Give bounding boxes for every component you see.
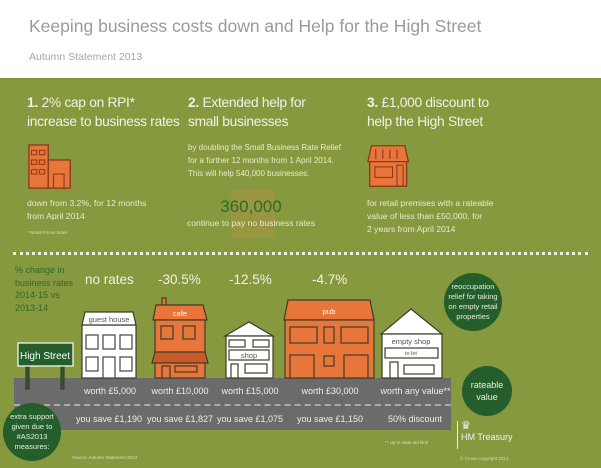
text 2: by doubling the Small Business Rate Relief xyxy=(188,143,341,152)
sign xyxy=(18,343,73,389)
logo: HM Treasury: ♛ xyxy=(461,420,471,432)
text: continue to pay no business rates xyxy=(187,218,315,228)
faint icon xyxy=(231,190,275,238)
text: you save £1,190 xyxy=(76,414,142,424)
text: you save £1,827 xyxy=(147,414,213,424)
cafe: cafe xyxy=(173,309,187,318)
callout: reoccupation: on empty retail xyxy=(448,302,498,311)
text 2 xyxy=(188,143,341,178)
callout: extra support: measures: xyxy=(14,442,50,451)
text: -30.5% xyxy=(158,272,201,287)
text 1: from April 2014 xyxy=(27,211,85,221)
heading 3: help the High Street xyxy=(367,114,483,129)
text: worth any value** xyxy=(380,386,451,396)
street scene xyxy=(17,297,444,390)
text: Source: Autumn Statement 2013 xyxy=(72,455,137,460)
heading 2: small businesses xyxy=(188,114,288,129)
change label: 2013-14 xyxy=(15,302,48,312)
icon: shop xyxy=(367,145,410,187)
text 3 xyxy=(367,198,494,234)
road xyxy=(14,378,451,430)
heading 1: increase to business rates xyxy=(27,114,179,129)
callout: extra support: #AS2013 xyxy=(17,432,47,441)
heading 2: 2. Extended help for xyxy=(188,95,306,110)
text: worth £30,000 xyxy=(301,386,359,396)
callout: reoccupation: properties xyxy=(456,312,490,321)
guest house xyxy=(82,312,136,378)
callout: extra support: extra support xyxy=(10,412,54,421)
cafe xyxy=(152,298,208,378)
logo: HM Treasury xyxy=(457,421,527,449)
icon: building xyxy=(28,144,71,189)
text: -4.7% xyxy=(312,272,347,287)
empty shop: empty shop xyxy=(392,337,430,346)
callout: rateable value: value xyxy=(476,392,498,402)
subtitle: Autumn Statement 2013 xyxy=(29,51,142,63)
text: you save £1,150 xyxy=(297,414,363,424)
text: -12.5% xyxy=(229,272,272,287)
logo: HM Treasury: HM Treasury xyxy=(461,432,513,442)
callout: reoccupation: reoccupation xyxy=(452,282,494,291)
change label: business rates xyxy=(15,278,73,288)
heading 2 xyxy=(188,95,306,129)
guest house: guest house xyxy=(89,315,129,324)
stat 360,000: 360,000 xyxy=(220,197,282,216)
text 2: for a further 12 months from 1 April 2014. xyxy=(188,156,334,165)
text: you save £1,075 xyxy=(217,414,283,424)
dotted divider xyxy=(13,252,588,255)
pub xyxy=(284,300,374,378)
shop xyxy=(225,322,273,378)
text: worth £10,000 xyxy=(151,386,209,396)
text: © Crown copyright 2013 xyxy=(460,456,508,461)
heading 1: 1. 2% cap on RPI* xyxy=(27,95,135,110)
footnotes: ** Up to state aid limit xyxy=(385,440,428,445)
text 3: value of less than £50,000, for xyxy=(367,211,482,221)
sign: High Street xyxy=(20,351,70,362)
text: * Retail Prices Index xyxy=(27,230,68,235)
text: 50% discount xyxy=(388,414,442,424)
title: Keeping business costs down and Help for the High Street xyxy=(29,16,481,36)
change label: 2014-15 vs xyxy=(15,290,60,300)
text 3: for retail premises with a rateable xyxy=(367,198,494,208)
empty shop xyxy=(381,309,442,378)
empty shop: to let xyxy=(405,351,417,357)
heading 3: 3. £1,000 discount to xyxy=(367,95,489,110)
text 1: down from 3.2%, for 12 months xyxy=(27,198,146,208)
change label xyxy=(15,265,73,312)
change label: % change in xyxy=(15,265,65,275)
callout: reoccupation xyxy=(444,273,502,331)
text 1 xyxy=(27,198,146,221)
text 3: 2 years from April 2014 xyxy=(367,224,455,234)
callout: reoccupation: relief for taking xyxy=(448,292,498,301)
percentages: no rates xyxy=(85,272,134,287)
heading 3 xyxy=(367,95,489,129)
values: worth £5,000 xyxy=(84,386,136,396)
shop: shop xyxy=(241,351,257,360)
pub: pub xyxy=(323,307,335,316)
callout: extra support xyxy=(3,403,61,461)
callout: extra support: given due to xyxy=(12,422,52,431)
text: worth £15,000 xyxy=(221,386,279,396)
text 2: This will help 540,000 businesses. xyxy=(188,169,309,178)
callout: rateable value: rateable xyxy=(471,380,503,390)
heading 1 xyxy=(27,95,180,129)
callout: rateable value xyxy=(462,366,512,416)
